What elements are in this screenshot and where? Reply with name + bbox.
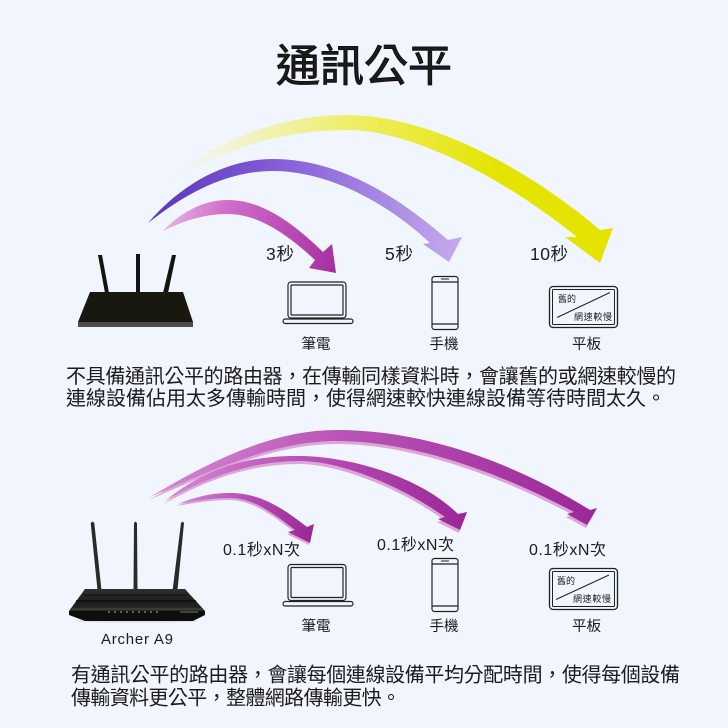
icon: tablet: 舊的 xyxy=(557,575,575,586)
label: tablet: 平板 xyxy=(572,618,601,635)
text block: with airtime fairness: 有通訊公平的路由器，會讓每個連線設備平均分配時間，使得每個設備 xyxy=(71,664,680,686)
label: 5 seconds: 5秒 xyxy=(385,244,413,264)
arrow: long magenta to tablet xyxy=(149,430,597,528)
icon: phone xyxy=(432,558,458,612)
label: phone: 手機 xyxy=(430,336,458,353)
icon: laptop xyxy=(283,282,353,324)
arrow: short magenta to laptop xyxy=(177,493,314,545)
label: laptop time: 0.1秒xN次 xyxy=(223,541,300,559)
icon: generic router xyxy=(78,254,193,327)
text block: without airtime fairness: 不具備通訊公平的路由器，在傳輸同樣資料時，會讓舊的或網速較慢的 xyxy=(66,365,676,388)
icon: tablet: 網速較慢 xyxy=(574,311,612,322)
icon: tablet: 網速較慢 xyxy=(573,593,611,604)
icon: tablet xyxy=(550,568,618,610)
icon: laptop xyxy=(283,564,353,606)
label: 10 seconds: 10秒 xyxy=(530,244,568,264)
icon: tablet: 舊的 xyxy=(558,293,576,304)
arrow: purple 5 seconds to phone xyxy=(148,159,462,262)
icon: Archer A9 router xyxy=(69,522,205,623)
text block: without airtime fairness xyxy=(66,365,676,410)
title: 通訊公平 xyxy=(276,42,452,91)
label: phone time: 0.1秒xN次 xyxy=(377,536,454,554)
text block: with airtime fairness: 傳輸資料更公平，整體網路傳輸更快。 xyxy=(71,686,401,710)
arrow: yellow 10 seconds to tablet xyxy=(150,115,613,263)
label: tablet time: 0.1秒xN次 xyxy=(529,541,606,559)
label: tablet: 平板 xyxy=(572,336,601,353)
icon: tablet xyxy=(550,286,618,328)
icon: phone xyxy=(432,276,458,330)
label: 3 seconds: 3秒 xyxy=(266,244,294,264)
arrow: middle magenta to phone xyxy=(164,456,467,533)
label: phone: 手機 xyxy=(430,618,458,635)
label: Archer A9: Archer A9 xyxy=(101,631,173,648)
text block: with airtime fairness xyxy=(71,664,680,710)
arrow: pink 3 seconds to laptop xyxy=(163,200,336,273)
label: laptop: 筆電 xyxy=(302,336,330,353)
label: laptop: 筆電 xyxy=(302,618,330,635)
text block: without airtime fairness: 連線設備佔用太多傳輸時間，使得網速較快連線設備等待時間太久。 xyxy=(66,387,666,410)
